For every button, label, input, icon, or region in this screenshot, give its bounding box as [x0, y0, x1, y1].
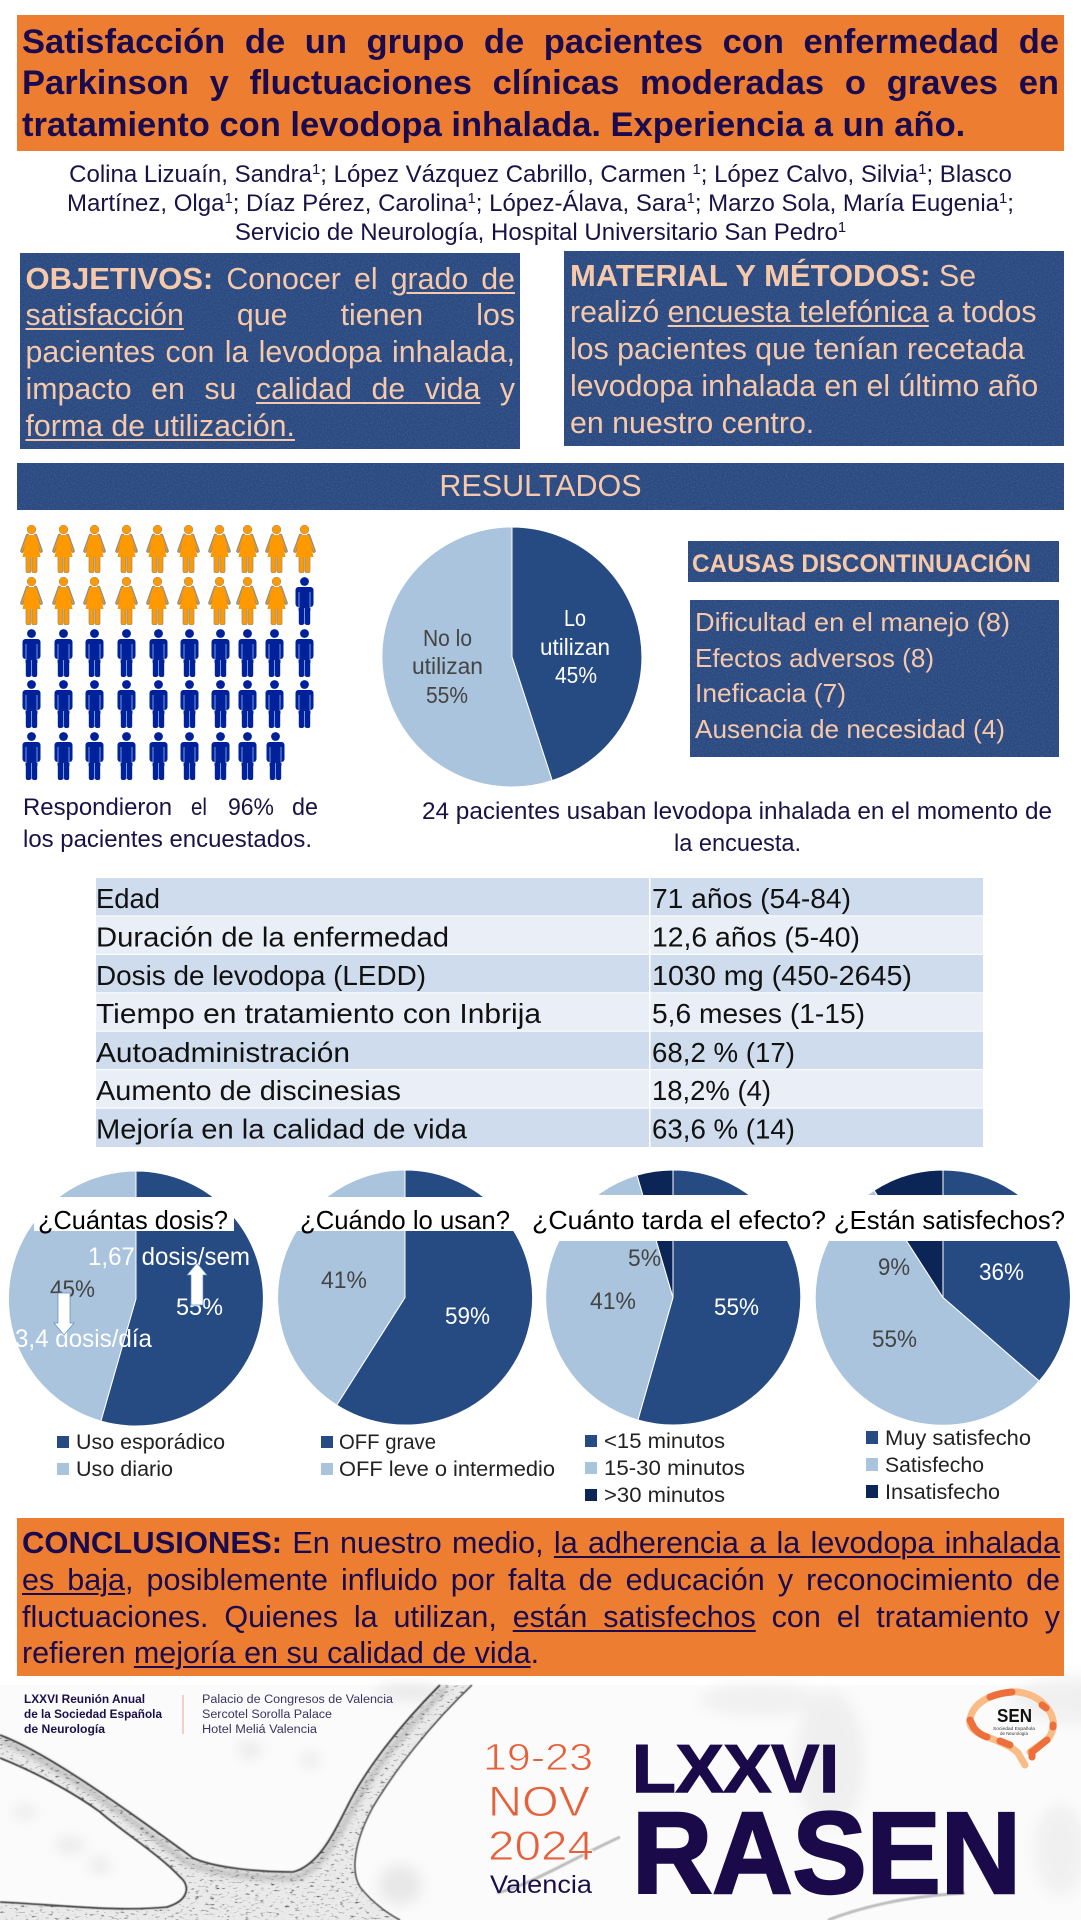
text: dates: 19-23: [483, 1737, 593, 1779]
text: congress name: de Neurología: [24, 1724, 106, 1736]
panel: material y métodos: realizó encuesta telefónica a todos: [570, 296, 1037, 329]
panel: causes list: [690, 600, 1059, 757]
heading: causas discontinuación: [688, 541, 1059, 582]
text: dates: [483, 1737, 594, 1899]
legend: doses: Uso esporádico: [76, 1430, 225, 1454]
legend: time to effect: [585, 1429, 745, 1507]
table: patient characteristics: 12,6 años (5-40): [652, 921, 860, 952]
panel: material y métodos: [564, 251, 1064, 446]
chart: doses pie: 45%: [50, 1276, 95, 1303]
legend: time to effect: 15-30 minutos: [604, 1456, 745, 1480]
table: patient characteristics: 5,6 meses (1-15): [652, 998, 865, 1029]
chart: usage pie: 55%: [426, 682, 468, 708]
title: Parkinson y fluctuaciones clínicas moderadas o graves en: [22, 64, 1059, 102]
heading: resultados: RESULTADOS: [439, 469, 642, 503]
panel: objetivos: OBJETIVOS: Conocer el grado de: [26, 261, 515, 296]
panel: conclusiones: refieren mejoría en su calidad de vida.: [22, 1636, 539, 1670]
chart: time to effect pie: 41%: [590, 1288, 636, 1315]
table: patient characteristics: [96, 878, 983, 1147]
title: tratamiento con levodopa inhalada. Experiencia a un año.: [22, 106, 965, 144]
chart: satisfaction pie: 36%: [979, 1259, 1024, 1286]
panel: objetivos: impacto en su calidad de vida y: [26, 373, 515, 406]
text: authors: Colina Lizuaín, Sandra1; López Vázquez Cabrillo, Carmen 1; López Calvo, Silvia1; Blasco: [69, 161, 1012, 188]
text: dates: Valencia: [490, 1871, 592, 1899]
legend: satisfaction: Insatisfecho: [885, 1480, 1000, 1504]
text: patients using: 24 pacientes usaban levodopa inhalada en el momento de: [422, 798, 1052, 825]
text: congress name: [24, 1694, 163, 1736]
text: patients using: la encuesta.: [674, 830, 801, 857]
chart: satisfaction pie: 9%: [878, 1254, 910, 1281]
logo: SEN brain: [970, 1692, 1053, 1765]
chart: when used pie: 59%: [445, 1303, 490, 1330]
legend: when used: OFF grave: [339, 1430, 436, 1454]
text: LXXVI RASEN: LXXVI: [632, 1731, 839, 1807]
table: patient characteristics: 68,2 % (17): [652, 1037, 795, 1068]
table: patient characteristics: Mejoría en la calidad de vida: [96, 1114, 467, 1145]
panel: material y métodos: levodopa inhalada en el último año: [570, 370, 1038, 403]
text: LXXVI RASEN: RASEN: [632, 1788, 1021, 1918]
chart: usage pie: [382, 527, 642, 787]
text: patients using: [422, 798, 1052, 857]
banner: congress footer: [0, 1676, 1081, 1920]
text: response rate: [23, 794, 318, 853]
panel: causes list: Efectos adversos (8): [695, 643, 934, 673]
panel: objetivos: satisfacción que tienen los: [26, 299, 515, 332]
table: patient characteristics: Autoadministración: [96, 1037, 350, 1068]
chart: satisfaction pie: 55%: [872, 1326, 917, 1353]
table: patient characteristics: Duración de la enfermedad: [96, 921, 449, 952]
panel: material y métodos: en nuestro centro.: [570, 407, 814, 440]
chart: satisfaction pie: [815, 1170, 1076, 1425]
text: congress name: LXXVI Reunión Anual: [24, 1694, 145, 1706]
legend: doses: [57, 1430, 225, 1481]
chart: time to effect pie: [532, 1170, 828, 1425]
text: authors: Servicio de Neurología, Hospital Universitario San Pedro1: [235, 219, 846, 246]
text: response rate: 96%: [228, 794, 274, 821]
chart: when used pie: [276, 1170, 534, 1425]
table: patient characteristics: 71 años (54-84): [652, 883, 851, 914]
legend: time to effect: >30 minutos: [604, 1483, 725, 1507]
logo: SEN brain: SEN: [997, 1706, 1032, 1726]
text: dates: 2024: [488, 1822, 594, 1869]
legend: satisfaction: Satisfecho: [885, 1453, 984, 1477]
panel: causes list: Dificultad en el manejo (8): [695, 607, 1010, 637]
text: authors: [67, 161, 1014, 246]
chart: usage pie: 45%: [555, 662, 597, 688]
panel: conclusiones: es baja, posiblemente influido por falta de educación y reconocimiento de: [22, 1563, 1060, 1597]
chart: when used pie: 41%: [321, 1267, 367, 1294]
chart: time to effect pie: 55%: [714, 1294, 759, 1321]
text: venues: [202, 1694, 394, 1736]
text: response rate: el: [191, 794, 207, 821]
logo: SEN brain: de Neurología: [1000, 1731, 1028, 1736]
text: congress name: de la Sociedad Española: [24, 1709, 163, 1721]
text: response rate: Respondieron: [23, 794, 172, 821]
chart: time to effect pie: ¿Cuánto tarda el efecto?: [532, 1205, 826, 1235]
chart: doses pie: 1,67 dosis/sem: [88, 1243, 250, 1271]
chart: when used pie: ¿Cuándo lo usan?: [300, 1205, 510, 1235]
chart: time to effect pie: 5%: [628, 1245, 661, 1272]
heading: causas discontinuación: CAUSAS DISCONTINUACIÓN: [692, 548, 1031, 578]
panel: conclusiones: fluctuaciones. Quienes la utilizan, están satisfechos con el tratamiento y: [22, 1600, 1060, 1634]
chart: satisfaction pie: ¿Están satisfechos?: [834, 1205, 1065, 1235]
title: [17, 15, 1064, 151]
table: patient characteristics: 1030 mg (450-2645): [652, 960, 912, 991]
table: patient characteristics: 63,6 % (14): [652, 1114, 795, 1145]
panel: objetivos: forma de utilización.: [26, 410, 295, 443]
group: people pictogram: [22, 525, 314, 780]
panel: objetivos: pacientes con la levodopa inhalada,: [26, 336, 515, 369]
legend: when used: [321, 1430, 555, 1481]
text: authors: Martínez, Olga1; Díaz Pérez, Carolina1; López-Álava, Sara1; Marzo Sola, María Eugenia1;: [67, 190, 1014, 217]
chart: usage pie: Lo: [564, 605, 586, 631]
panel: objetivos: [20, 253, 520, 449]
text: LXXVI RASEN: [632, 1731, 1021, 1918]
panel: conclusiones: [17, 1518, 1064, 1676]
panel: material y métodos: los pacientes que tenían recetada: [570, 333, 1025, 366]
legend: when used: OFF leve o intermedio: [339, 1457, 555, 1481]
logo: SEN brain: Sociedad Española: [993, 1726, 1036, 1731]
panel: material y métodos: MATERIAL Y MÉTODOS: Se: [570, 258, 976, 293]
chart: doses pie: 3,4 dosis/día: [15, 1325, 152, 1353]
text: venues: Palacio de Congresos de Valencia: [202, 1694, 394, 1706]
legend: satisfaction: [866, 1426, 1031, 1504]
chart: doses pie: 55%: [176, 1294, 223, 1321]
table: patient characteristics: 18,2% (4): [652, 1075, 771, 1106]
panel: causes list: Ausencia de necesidad (4): [695, 714, 1005, 744]
table: patient characteristics: Tiempo en tratamiento con Inbrija: [96, 998, 541, 1029]
illustration: neuron: [0, 1685, 965, 1920]
panel: causes list: Ineficacia (7): [695, 678, 846, 708]
title: Satisfacción de un grupo de pacientes con enfermedad de: [22, 23, 1059, 61]
heading: resultados: [17, 463, 1064, 510]
chart: doses pie: ¿Cuántas dosis?: [38, 1205, 228, 1235]
chart: usage pie: No lo: [423, 625, 472, 651]
table: patient characteristics: Edad: [96, 883, 160, 914]
panel: conclusiones: CONCLUSIONES: En nuestro medio, la adherencia a la levodopa inhalada: [22, 1525, 1060, 1560]
legend: time to effect: <15 minutos: [604, 1429, 725, 1453]
chart: doses pie: [8, 1171, 263, 1426]
text: dates: NOV: [488, 1778, 590, 1826]
legend: doses: Uso diario: [76, 1457, 173, 1481]
chart: usage pie: utilizan: [412, 653, 483, 679]
table: patient characteristics: Aumento de discinesias: [96, 1075, 401, 1106]
text: venues: Hotel Meliá Valencia: [202, 1724, 318, 1736]
text: venues: Sercotel Sorolla Palace: [202, 1709, 332, 1721]
legend: satisfaction: Muy satisfecho: [885, 1426, 1031, 1450]
table: patient characteristics: Dosis de levodopa (LEDD): [96, 960, 426, 991]
background: blurred neuron haze: [13, 1676, 1081, 1905]
text: response rate: de: [292, 794, 318, 821]
text: response rate: los pacientes encuestados.: [23, 826, 312, 853]
chart: usage pie: utilizan: [540, 634, 610, 660]
